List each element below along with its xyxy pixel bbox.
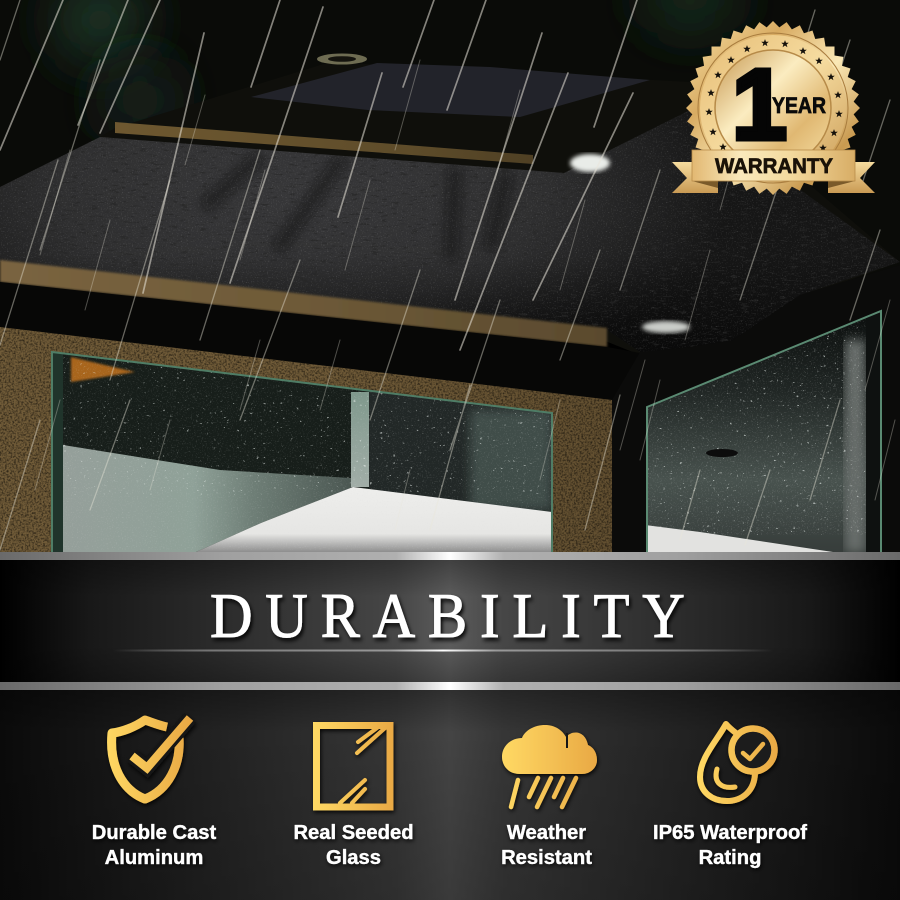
- feature: weather resistant: [501, 725, 597, 869]
- label: Weather: [507, 822, 586, 844]
- cap screw: [317, 54, 367, 64]
- feature: real seeded glass: [293, 726, 414, 869]
- icon: glass pane: [316, 726, 390, 807]
- ribbon: [672, 150, 875, 193]
- corner highlight: [642, 321, 690, 333]
- left glass green edge: [52, 352, 552, 552]
- label: Rating: [699, 847, 761, 869]
- label: Glass: [326, 847, 381, 869]
- title underline: [113, 650, 773, 652]
- front roof surface: [0, 110, 900, 360]
- ring of stars: [705, 39, 843, 151]
- numeral 1: 1: [732, 49, 787, 161]
- label: Real Seeded: [293, 822, 414, 844]
- lower silver bar: [0, 682, 900, 690]
- label: Durable Cast: [92, 822, 217, 844]
- WARRANTY: WARRANTY: [715, 155, 833, 178]
- icon: water drop with check: [700, 724, 774, 801]
- title band: [0, 560, 900, 682]
- top silver bar: [0, 552, 900, 560]
- right window glass: [648, 318, 866, 552]
- lantern back roof: [100, 62, 900, 355]
- seal: [683, 18, 863, 198]
- gold eave band: [0, 260, 607, 347]
- solar panel: [251, 63, 650, 117]
- right roof underside and post: [612, 265, 900, 552]
- rain streaks: [0, 0, 895, 550]
- photo: rain-soaked lantern close-up: [0, 0, 900, 555]
- gold roof trim: [115, 122, 533, 164]
- features panel: [0, 690, 900, 900]
- blurred garden background: [0, 0, 900, 300]
- icon: rain cloud: [502, 725, 597, 807]
- roof highlight: [570, 154, 610, 172]
- frame around left window: [0, 320, 615, 555]
- feature: durable cast aluminum: [92, 718, 217, 869]
- label: Resistant: [501, 847, 592, 869]
- YEAR: YEAR: [772, 93, 826, 118]
- warranty badge: [672, 18, 875, 198]
- title: DURABILITY: [210, 581, 685, 652]
- right glass green edge: [647, 311, 881, 552]
- icon: shield with check: [112, 718, 190, 799]
- left window glass: [52, 345, 552, 555]
- label: IP65 Waterproof: [653, 822, 807, 844]
- label: Aluminum: [105, 847, 203, 869]
- dark shadow under the eave: [0, 282, 645, 410]
- feature: IP65 waterproof rating: [653, 724, 807, 869]
